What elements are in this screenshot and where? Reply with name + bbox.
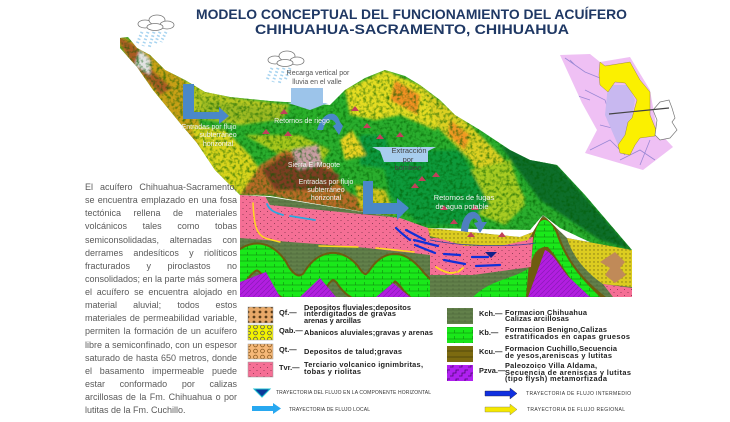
overlay labels on terrain: Entradas por flujo [299, 179, 354, 186]
legend item: Qt [248, 344, 402, 359]
legend item: Qab [248, 325, 433, 340]
text block: aquifer description: se encuentra emplazado en una fosa [85, 195, 237, 205]
legend: local flow: TRAYECTORIA DE FLUJO LOCAL [289, 407, 370, 413]
overlay labels on terrain: Extracción [391, 146, 427, 155]
text block: aquifer description: volcánicos tales como tobas [85, 221, 237, 231]
layer: right alluvial fill [567, 238, 632, 287]
icon: horizontal flow marker [485, 252, 497, 258]
flow arrows in cross-section [253, 203, 535, 273]
legend item: Qt: Depositos de talud;gravas [304, 347, 402, 356]
legend item: Pzva: Paleozoico Villa Aldama, [505, 361, 597, 370]
overlay: vertical recharge arrow [288, 88, 328, 110]
text block: aquifer description: material aluvial; todos estos [85, 300, 237, 310]
overlay labels on terrain: Retornos de riego [274, 118, 330, 125]
title [196, 6, 627, 37]
text block: aquifer description: semiconsolidadas, alternadas con [85, 234, 237, 244]
overlay: leak return arrow [461, 212, 487, 233]
legend item: Kb: Formacion Benigno,Calizas [505, 325, 607, 334]
legend item: Tvr: tobas y riolitas [304, 367, 361, 376]
legend item: Qf fluvial: Depositos fluviales;depositos [304, 303, 411, 312]
legend right [447, 308, 631, 383]
text block: aquifer description: lutitas de la Fm. Cuchillo. [85, 405, 186, 415]
overlay labels on terrain: subterráneo [307, 187, 345, 194]
overlay labels on terrain: por [403, 155, 414, 164]
layer: green folded limestone [232, 257, 436, 304]
legend item: Kcu: de yesos,areniscas y lutitas [505, 351, 612, 360]
legend item: Pzva: Pzva.— [479, 366, 506, 375]
legend item: Pzva: Secuencia de areniscas y lutitas [505, 368, 631, 377]
legend item: Tvr: Tvr.— [279, 363, 300, 372]
title: MODELO CONCEPTUAL DEL FUNCIONAMIENTO DEL ACUÍFERO [196, 6, 627, 22]
overlay labels on terrain: Entradas por flujo [182, 124, 237, 131]
legend left [248, 303, 433, 377]
legend: regional flow: TRAYECTORIA DE FLUJO REGIONAL [527, 407, 625, 413]
text block: aquifer description: fracturados y piroclastos no [85, 261, 237, 271]
legend item: Kb: Kb.— [479, 328, 499, 337]
legend item: Kb [447, 325, 630, 343]
overlay labels on terrain: horizontal [203, 141, 234, 148]
overlay: inflow arrow centre [363, 181, 409, 220]
overlay labels on terrain: de agua potable [435, 202, 489, 211]
legend: horizontal flow [254, 389, 431, 397]
layer: yellow alluvial [428, 228, 533, 246]
legend item: Qab: Qab.— [279, 326, 303, 335]
legend item: Qab: Abanicos aluviales;gravas y arenas [304, 328, 433, 337]
overlay: inflow arrow left [183, 84, 229, 124]
legend item: Kcu [447, 344, 618, 362]
legend item: Qf fluvial: interdigitados de gravas [304, 309, 396, 318]
legend item: Tvr [248, 360, 423, 377]
layer: pink volcanic [240, 195, 533, 275]
layer: basin grey-green limestone [430, 278, 446, 297]
layer: right green syncline [473, 268, 530, 297]
text block: aquifer description: estar conformado por calizas [85, 379, 237, 389]
legend: intermediate flow [485, 388, 631, 399]
text block: aquifer description: consolidados; en la parte más somera [85, 274, 237, 284]
text block: aquifer description: El acuífero Chihuahua-Sacramento, [85, 182, 237, 192]
legend item: Pzva: (tipo flysh) metamorfizada [505, 374, 608, 383]
legend item: Kb: estratificados en capas gruesos [505, 332, 630, 341]
text block: aquifer description: libre a semiconfinado, con un espesor [85, 340, 237, 350]
overlay labels on terrain [182, 70, 494, 211]
geological cross-section [240, 195, 632, 297]
legend item: Qf fluvial: arenas y arcillas [304, 316, 361, 325]
legend item: Kch: Kch.— [479, 309, 503, 318]
location map [560, 54, 677, 170]
legend item: Kch: Formacion Chihuahua [505, 308, 588, 317]
text block: aquifer description: derrames andesíticos y riolíticos [85, 248, 237, 258]
text block: aquifer description: permiten la formación de un acuífero [85, 326, 237, 336]
legend item: Kcu: Formacion Cuchillo,Secuencia [505, 344, 618, 353]
text block: aquifer description: tectónica rellena de materiales [85, 208, 237, 218]
overlay labels on terrain: lluvia en el valle [292, 79, 342, 86]
text block: aquifer description: saturado de hasta 650 metros, donde [85, 353, 237, 363]
overlay labels on terrain: subterráneo [199, 132, 237, 139]
text block: aquifer description: el acuífero se encuentra alojado en [85, 287, 237, 297]
title: CHIHUAHUA-SACRAMENTO, CHIHUAHUA [255, 22, 569, 37]
overlay labels on terrain: Recarga vertical por [287, 70, 350, 77]
legend item: Kch [447, 308, 588, 324]
text block: aquifer description: el basamento impermeable puede [85, 366, 237, 376]
legend item: Qt: Qt.— [279, 345, 297, 354]
layer: purple basement [240, 272, 410, 297]
terrain block diagram [120, 37, 632, 250]
legend: intermediate flow: TRAYECTORIA DE FLUJO INTERMEDIO [526, 391, 631, 397]
text block: aquifer description: materiales de permeabilidad variable, [85, 313, 237, 323]
overlay labels on terrain: Sierra El Mogote [288, 162, 340, 169]
legend: horizontal flow: TRAYECTORIA DEL FLUJO EN LA COMPONENTE HORIZONTAL [276, 390, 431, 396]
overlay labels on terrain: Retornos de fugas [434, 193, 494, 202]
overlay: irrigation return arrow [317, 114, 343, 135]
text block: aquifer description [85, 182, 238, 415]
legend item: Kch: Calizas arcillosas [505, 314, 569, 323]
legend item: Kcu: Kcu.— [479, 347, 503, 356]
layer: green anticline [526, 217, 606, 297]
flow legend [252, 388, 631, 415]
legend item: Tvr: Terciario volcanico ignimbritas, [304, 360, 423, 369]
overlay labels on terrain: horizontal [311, 195, 342, 202]
overlay: extraction arrow [372, 147, 436, 162]
legend item: Pzva [447, 361, 631, 383]
legend item: Qf fluvial [248, 303, 411, 325]
icon: rain cloud over valley [267, 51, 304, 84]
legend: regional flow [485, 404, 625, 415]
legend: local flow [252, 403, 370, 414]
text block: aquifer description: arcillosas de la Fm. Chihuahua o por [85, 392, 237, 402]
icon: rain cloud over sierra [137, 15, 174, 48]
legend item: Qf fluvial: Qf.— [279, 308, 297, 317]
overlay labels on terrain: bombeo [394, 163, 422, 172]
well markers [262, 106, 506, 237]
